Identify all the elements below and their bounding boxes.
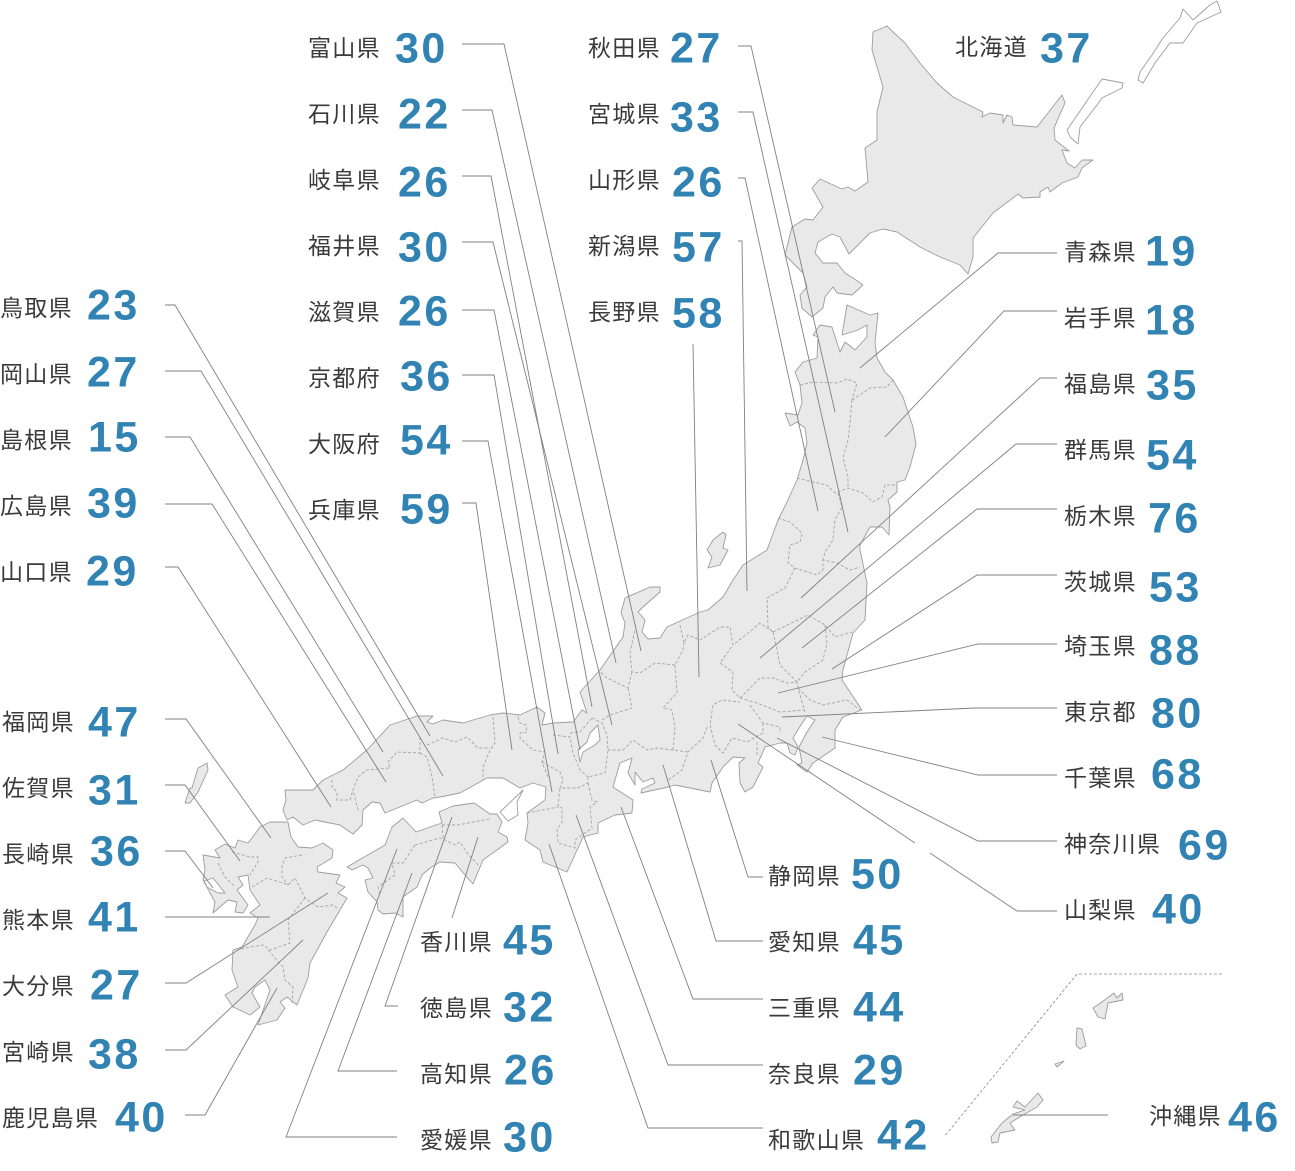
label: 香川県: 45 (503, 916, 556, 964)
labels: central column 2 (588, 24, 725, 337)
label: 鳥取県 (0, 281, 140, 329)
label: 石川県 (308, 90, 451, 138)
leader: 福岡県 (165, 719, 271, 838)
label: 静岡県: 静岡県 (768, 863, 841, 889)
leader: 広島県 (165, 504, 386, 782)
label: 宮崎県 (2, 1030, 141, 1078)
label: 熊本県: 41 (88, 893, 141, 941)
label: 東京都: 東京都 (1064, 699, 1137, 725)
label: 長野県: 長野県 (588, 299, 661, 325)
label: 岡山県: 27 (87, 348, 140, 396)
leader: 富山県 (462, 44, 641, 651)
label: 鹿児島県: 鹿児島県 (2, 1105, 99, 1131)
leader: 千葉県 (822, 737, 1057, 775)
label: 神奈川県: 神奈川県 (1064, 831, 1161, 857)
label: 栃木県 (1064, 494, 1201, 542)
label: 大分県 (2, 961, 143, 1009)
label: 広島県: 広島県 (0, 493, 73, 519)
label: 徳島県: 徳島県 (420, 995, 493, 1021)
label: 石川県: 石川県 (308, 101, 381, 127)
label: 静岡県 (768, 850, 904, 898)
region: Shikoku (347, 803, 508, 917)
label: 和歌山県 (768, 1111, 930, 1159)
label: 京都府: 36 (400, 352, 453, 400)
leader: 埼玉県 (778, 644, 1057, 693)
label: 群馬県: 群馬県 (1064, 437, 1137, 463)
label: 長野県: 58 (672, 289, 725, 337)
label: 神奈川県 (1064, 821, 1231, 869)
leader: 香川県 (452, 837, 478, 918)
leader: 福島県 (801, 378, 1057, 598)
label: 沖縄県 (1149, 1093, 1281, 1141)
label: 宮崎県: 38 (88, 1030, 141, 1078)
leader: 神奈川県 (777, 738, 1057, 841)
label: 群馬県 (1064, 431, 1199, 479)
leader: 和歌山県 (549, 844, 763, 1128)
leader: 山梨県 continued (738, 724, 915, 843)
label: 千葉県: 千葉県 (1064, 765, 1137, 791)
label: 大阪府 (308, 416, 453, 464)
label: 千葉県: 68 (1151, 750, 1204, 798)
label: 宮城県 (588, 93, 723, 141)
label: 富山県: 富山県 (308, 35, 381, 61)
label: 宮崎県: 宮崎県 (2, 1039, 75, 1065)
label: 岡山県: 岡山県 (0, 361, 73, 387)
label: 島根県: 島根県 (0, 427, 73, 453)
label: 新潟県 (588, 223, 725, 271)
label: 北海道: 北海道 (955, 34, 1028, 60)
label: 山形県: 26 (672, 158, 725, 206)
island: Kunashiri (1067, 79, 1123, 144)
label: 佐賀県 (2, 766, 141, 814)
label: 新潟県: 57 (672, 223, 725, 271)
label: 熊本県 (2, 893, 141, 941)
label: 茨城県: 53 (1149, 563, 1202, 611)
label: 滋賀県 (308, 287, 451, 335)
label: 山口県 (0, 547, 139, 595)
island: Etorofu (1138, 1, 1221, 83)
island: Okinoerabu (1055, 1061, 1064, 1067)
leader: 山梨県 (930, 853, 1057, 911)
leader: 岩手県 (885, 311, 1057, 437)
label: 長崎県: 長崎県 (2, 841, 75, 867)
label: 新潟県: 新潟県 (588, 233, 661, 259)
label: 徳島県: 32 (503, 983, 556, 1031)
label: 島根県 (0, 413, 141, 461)
label: 福井県 (308, 223, 451, 271)
label: 鹿児島県 (2, 1093, 168, 1141)
leader: 長野県 (693, 344, 699, 677)
labels: right column (1064, 227, 1281, 1141)
label: 群馬県: 54 (1146, 431, 1199, 479)
label: 岐阜県 (308, 158, 451, 206)
label: 高知県 (420, 1046, 557, 1094)
leader: 熊本県 (165, 916, 270, 918)
label: 宮城県: 宮城県 (588, 101, 661, 127)
label: 岩手県: 岩手県 (1064, 305, 1137, 331)
leader: 岡山県 (165, 371, 443, 776)
label: 青森県 (1064, 227, 1198, 275)
label: 大阪府: 大阪府 (308, 431, 381, 457)
label: 愛媛県: 愛媛県 (420, 1127, 493, 1153)
label: 大阪府: 54 (400, 416, 453, 464)
leader: 高知県 (338, 873, 412, 1071)
leader: 茨城県 (832, 575, 1057, 669)
label: 愛媛県 (420, 1113, 556, 1161)
label: 山梨県: 40 (1152, 885, 1205, 933)
label: 東京都: 80 (1151, 689, 1204, 737)
label: 和歌山県: 和歌山県 (768, 1127, 865, 1153)
label: 栃木県: 76 (1148, 494, 1201, 542)
label: 京都府: 京都府 (308, 365, 381, 391)
label: 福島県: 福島県 (1064, 371, 1137, 397)
label: 和歌山県: 42 (877, 1111, 930, 1159)
label: 宮城県: 33 (670, 93, 723, 141)
label: 愛知県: 愛知県 (768, 929, 841, 955)
label: 高知県: 高知県 (420, 1061, 493, 1087)
leader: 青森県 (860, 253, 1057, 368)
leader: 愛知県 (663, 765, 763, 941)
label: 秋田県 (588, 24, 723, 72)
label: 奈良県: 29 (853, 1046, 906, 1094)
label: 愛知県 (768, 916, 906, 964)
prefecture borders (218, 379, 897, 1003)
label: 山梨県 (1064, 885, 1205, 933)
label: 静岡県: 50 (851, 850, 904, 898)
label: 福井県: 福井県 (308, 233, 381, 259)
labels: left column Chugoku (0, 281, 141, 595)
label: 兵庫県: 59 (400, 485, 453, 533)
region: Honshu (283, 305, 916, 872)
label: 栃木県: 栃木県 (1064, 503, 1137, 529)
label: 熊本県: 熊本県 (2, 907, 75, 933)
label: 京都府 (308, 352, 453, 400)
label: 神奈川県: 69 (1178, 821, 1231, 869)
label: 大分県: 27 (90, 961, 143, 1009)
label: 沖縄県: 沖縄県 (1149, 1103, 1222, 1129)
labels: Shikoku (420, 916, 557, 1161)
leader: 福井県 (462, 242, 612, 725)
label: 富山県 (308, 24, 448, 72)
label: 富山県: 30 (395, 24, 448, 72)
leader: 新潟県 (738, 241, 747, 591)
leader: 山形県 (738, 178, 818, 511)
label: 奈良県: 奈良県 (768, 1061, 841, 1087)
label: 埼玉県: 88 (1149, 626, 1202, 674)
region: Kyushu (203, 822, 347, 1025)
label: 奈良県 (768, 1046, 906, 1094)
label: 青森県: 青森県 (1064, 239, 1137, 265)
leader: 京都府 (462, 375, 558, 754)
label: 長野県 (588, 289, 725, 337)
map of Japan (185, 1, 1221, 1143)
leader: 大阪府 (462, 441, 552, 792)
island: Tsushima (185, 763, 208, 803)
lake: Biwa (578, 725, 600, 762)
label: 鹿児島県: 40 (115, 1093, 168, 1141)
label: 兵庫県: 兵庫県 (308, 497, 381, 523)
leader: 徳島県 (385, 817, 452, 1006)
label: 北海道: 37 (1040, 24, 1093, 72)
island: Okinawa (991, 1093, 1043, 1143)
label: 香川県 (420, 916, 556, 964)
label: 岐阜県: 岐阜県 (308, 167, 381, 193)
labels: Tokai and Kinki south (768, 850, 930, 1159)
leader: 山口県 (165, 567, 331, 807)
label: 福井県: 30 (398, 223, 451, 271)
label: 滋賀県: 26 (398, 287, 451, 335)
label: 大分県: 大分県 (2, 973, 75, 999)
label: 茨城県: 茨城県 (1064, 569, 1137, 595)
label: 三重県: 三重県 (768, 995, 841, 1021)
label: 埼玉県 (1064, 626, 1202, 674)
label: 青森県: 19 (1145, 227, 1198, 275)
leader: 宮崎県 (165, 940, 303, 1050)
labels: left column Kyushu (2, 698, 168, 1141)
label: 岡山県 (0, 348, 140, 396)
leader: 佐賀県 (165, 785, 240, 861)
label: 香川県: 香川県 (420, 929, 493, 955)
leader: 大分県 (165, 893, 328, 983)
leader lines (165, 44, 1108, 1137)
label: 山口県: 29 (86, 547, 139, 595)
label: 岩手県: 18 (1145, 296, 1198, 344)
island: Tokunoshima (1076, 1028, 1086, 1049)
leader: 兵庫県 (462, 503, 512, 750)
label: 島根県: 15 (88, 413, 141, 461)
label: 岩手県 (1064, 296, 1198, 344)
dashed inset frame for Okinawa (944, 974, 1222, 1137)
label: 愛知県: 45 (853, 916, 906, 964)
label: 石川県: 22 (398, 90, 451, 138)
label: 沖縄県: 46 (1228, 1093, 1281, 1141)
label: 兵庫県 (308, 485, 453, 533)
leader: 長崎県 (165, 851, 213, 888)
label: 岐阜県: 26 (398, 158, 451, 206)
label: 長崎県: 36 (90, 827, 143, 875)
label: 福島県 (1064, 361, 1199, 409)
leader: 三重県 (621, 807, 763, 999)
label: 佐賀県: 佐賀県 (2, 775, 75, 801)
label: 福岡県: 47 (88, 698, 141, 746)
label: 東京都 (1064, 689, 1204, 737)
labels: central column 1 (308, 24, 453, 533)
leader: 奈良県 (576, 815, 763, 1065)
label: 徳島県 (420, 983, 556, 1031)
island: Sado (707, 532, 728, 568)
label: 福岡県 (2, 698, 141, 746)
label: 山梨県: 山梨県 (1064, 897, 1137, 923)
leader: 静岡県 (711, 760, 763, 877)
label: 広島県 (0, 479, 140, 527)
leader: 秋田県 (738, 46, 835, 412)
label: 福島県: 35 (1146, 361, 1199, 409)
island: Amami (1093, 993, 1123, 1019)
label: 千葉県 (1064, 750, 1204, 798)
leader: 鳥取県 (165, 305, 430, 736)
leader: 群馬県 (760, 444, 1057, 658)
leader: 島根県 (165, 437, 383, 752)
label: 滋賀県: 滋賀県 (308, 299, 381, 325)
leader: 沖縄県 (1013, 1114, 1108, 1116)
leader: 岐阜県 (462, 176, 592, 707)
label: 鳥取県: 23 (87, 281, 140, 329)
leader: 栃木県 (802, 509, 1057, 648)
label: 埼玉県: 埼玉県 (1064, 633, 1137, 659)
leader: 鹿児島県 (185, 988, 277, 1115)
leader: 石川県 (462, 110, 616, 663)
leader: 宮城県 (738, 112, 848, 532)
label: 山形県: 山形県 (588, 167, 661, 193)
region: Hokkaido (785, 26, 1093, 317)
label: 秋田県: 秋田県 (588, 35, 661, 61)
label: 高知県: 26 (504, 1046, 557, 1094)
label: 三重県 (768, 983, 906, 1031)
label: 愛媛県: 30 (503, 1113, 556, 1161)
label: 山口県: 山口県 (0, 559, 73, 585)
island: Goto bay (204, 878, 225, 893)
label: 秋田県: 27 (670, 24, 723, 72)
label: 鳥取県: 鳥取県 (0, 295, 73, 321)
leader: 愛媛県 (286, 849, 397, 1137)
island: Awaji (500, 790, 523, 821)
label: 三重県: 44 (853, 983, 906, 1031)
leader: 東京都 (782, 708, 1057, 717)
leader: 滋賀県 (462, 310, 580, 750)
label: 佐賀県: 31 (88, 766, 141, 814)
label: 北海道 (955, 24, 1093, 72)
label: 山形県 (588, 158, 725, 206)
label: 福岡県: 福岡県 (2, 709, 75, 735)
label: 茨城県 (1064, 563, 1202, 611)
label: 広島県: 39 (87, 479, 140, 527)
label: 長崎県 (2, 827, 143, 875)
